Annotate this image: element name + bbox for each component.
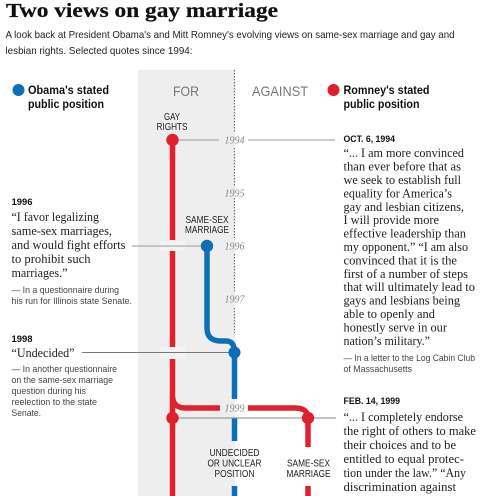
1999 connector <box>172 417 336 419</box>
year labels: 1997 <box>224 294 245 306</box>
Romney quote 1994: gays and lesbians being <box>344 292 460 308</box>
Obama quote 1998 <box>12 334 117 419</box>
1996 connector <box>132 245 207 247</box>
label: gay rights: RIGHTS <box>156 122 188 133</box>
Romney quote 1999: “... I completely endorse <box>344 409 463 424</box>
Obama quote 1996: and would fight efforts <box>12 237 126 252</box>
year labels: 1995 <box>224 188 244 200</box>
Romney quote 1994: nation’s military.” <box>344 333 430 348</box>
title: Two views on gay marriage <box>6 0 278 22</box>
Romney red timeline <box>172 140 308 496</box>
Romney quote 1994: — In a letter to the Log Cabin Club <box>344 353 475 364</box>
Obama quote 1998: question during his <box>12 386 86 397</box>
label: same-sex marriage (Obama): SAME-SEX <box>186 215 229 226</box>
legend: Obama: Obama's stated <box>28 85 109 97</box>
Romney 1994 marker <box>166 134 179 146</box>
label: undecided or unclear position: POSITION <box>214 469 254 480</box>
Romney quote 1999: entitled to equal protec- <box>344 451 464 466</box>
Obama 1996 marker <box>201 240 213 252</box>
Romney quote 1994: able to openly and <box>344 306 435 321</box>
intro text: A look back at President Obama's and Mitt Romney's evolving views on same-sex marriage and gay and <box>6 29 455 41</box>
label: undecided or unclear position <box>208 448 262 480</box>
column heading: for: FOR <box>173 83 199 99</box>
Obama quote 1996: to prohibit such <box>12 251 91 266</box>
legend: Romney: Romney's stated <box>344 85 430 97</box>
label: same-sex marriage (Romney) <box>286 458 331 480</box>
column heading: against: AGAINST <box>252 83 308 99</box>
dotted divider between for and against <box>234 70 236 333</box>
Obama blue timeline <box>207 246 234 496</box>
Romney quote 1999: their choices and to be <box>344 437 456 452</box>
Romney 1999 marker same-sex marriage <box>302 412 314 424</box>
Romney quote 1999 <box>344 396 476 494</box>
Romney quote 1994: I will provide more <box>344 212 439 227</box>
Romney quote 1999: FEB. 14, 1999 <box>344 396 400 406</box>
Obama quote 1998: Senate. <box>12 408 41 419</box>
label: same-sex marriage (Romney): MARRIAGE <box>286 469 331 480</box>
Romney quote 1999: tion under the law.” “Any <box>344 465 466 480</box>
label: same-sex marriage (Romney): SAME-SEX <box>287 458 330 470</box>
Obama quote 1996 <box>12 197 132 307</box>
intro text <box>6 29 455 57</box>
Romney quote 1994: honestly serve in our <box>344 320 448 334</box>
gap behind 1996 connector <box>160 241 185 251</box>
label: gay rights <box>156 112 188 133</box>
1998 connector <box>82 352 234 354</box>
Romney quote 1994: of Massachusetts <box>344 364 412 375</box>
year labels: 1999 <box>224 404 245 414</box>
label: same-sex marriage (Obama) <box>185 215 229 236</box>
legend: Romney <box>328 84 430 111</box>
Obama quote 1998: “Undecided” <box>12 345 75 360</box>
year labels: 1996 <box>224 242 245 252</box>
label: same-sex marriage (Obama): MARRIAGE <box>185 225 229 236</box>
Romney quote 1994: convinced that it is the <box>344 252 457 268</box>
Romney quote 1994 <box>344 134 475 375</box>
Obama quote 1996: “I favor legalizing <box>12 209 99 224</box>
Obama quote 1996: marriages.” <box>12 265 68 280</box>
Obama quote 1998: — In another questionnaire <box>12 364 117 375</box>
Romney quote 1999: discrimination against <box>344 479 456 494</box>
year labels: 1994 <box>224 136 245 146</box>
intro text: lesbian rights. Selected quotes since 1994: <box>6 45 192 57</box>
legend: Obama: public position <box>28 99 104 111</box>
Romney quote 1994: equality for America’s <box>344 186 452 200</box>
Obama quote 1998: on the same-sex marriage <box>12 375 113 386</box>
legend: Obama <box>12 84 109 111</box>
Obama quote 1996: his run for Illinois state Senate. <box>12 296 132 307</box>
Romney quote 1994: we seek to establish full <box>344 172 461 187</box>
Romney quote 1994: first of a number of steps <box>344 266 468 281</box>
panel: FOR column background <box>138 70 235 496</box>
Romney quote 1999: the right of others to make <box>344 423 476 438</box>
legend: Romney: public position <box>344 99 420 111</box>
Obama quote 1998: 1998 <box>12 334 32 344</box>
label: undecided or unclear position: OR UNCLEAR <box>208 458 262 470</box>
Romney 1999 marker for <box>166 412 179 424</box>
label: undecided or unclear position: UNDECIDED <box>210 448 260 459</box>
Romney quote 1994: that will ultimately lead to <box>344 279 475 294</box>
Obama quote 1996: same-sex marriages, <box>12 223 112 238</box>
Obama quote 1996: 1996 <box>12 197 32 207</box>
Romney quote 1994: OCT. 6, 1994 <box>344 134 395 144</box>
year 1994 connector <box>172 139 335 141</box>
Romney quote 1994: gay and lesbian citizens, <box>344 199 464 214</box>
Romney quote 1994: my opponent.” “I am also <box>344 239 468 254</box>
Obama 1998 marker <box>228 346 240 358</box>
Romney quote 1994: than ever before that as <box>344 158 461 174</box>
year labels <box>224 136 245 414</box>
label: gay rights: GAY <box>164 112 180 123</box>
Romney quote 1994: effective leadership than <box>344 226 466 240</box>
gap behind 1998 connector <box>160 347 185 359</box>
Romney quote 1994: “... I am more convinced <box>344 145 464 160</box>
Obama quote 1998: reelection to the state <box>12 397 97 408</box>
Obama quote 1996: — In a questionnaire during <box>12 285 119 296</box>
